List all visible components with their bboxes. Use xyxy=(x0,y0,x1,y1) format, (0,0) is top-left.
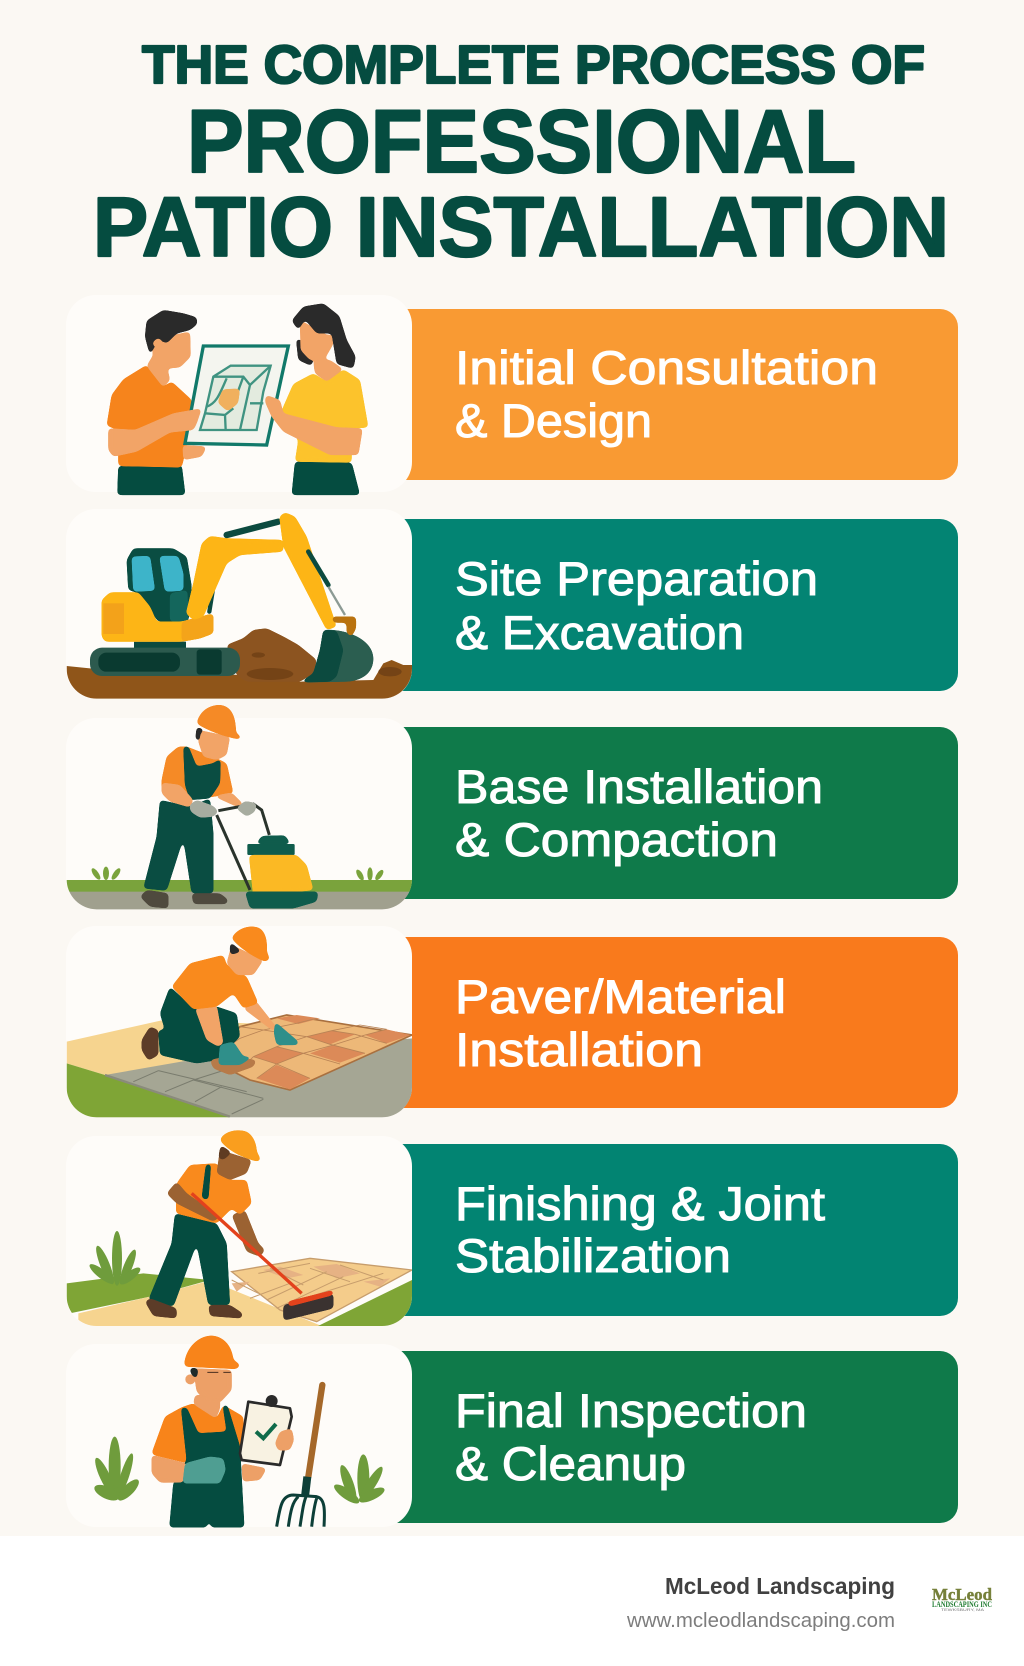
label bar: Site Preparation & Excavation xyxy=(380,519,958,691)
footer logo: LANDSCAPING INC xyxy=(932,1600,992,1609)
label bar: Paver/Material Installation xyxy=(380,937,958,1108)
title xyxy=(93,35,949,274)
title: PATIO INSTALLATION xyxy=(93,180,949,274)
footer logo: McLeod xyxy=(932,1585,993,1604)
label bar: Paver/Material Installation: Installation xyxy=(455,1023,703,1076)
label bar: Final Inspection & Cleanup xyxy=(380,1351,958,1523)
step 3: base installation xyxy=(66,705,958,910)
label bar: Final Inspection & Cleanup: & Cleanup xyxy=(455,1437,686,1490)
footer brand text: McLeod Landscaping xyxy=(665,1573,895,1599)
label bar: Final Inspection & Cleanup: Final Inspection xyxy=(455,1384,807,1437)
step 5: finishing and joint stabilization xyxy=(66,1130,958,1328)
label bar: Site Preparation & Excavation: Site Preparation xyxy=(455,552,818,605)
label bar: Finishing & Joint Stabilization: Stabilization xyxy=(455,1229,731,1282)
footer brand text xyxy=(626,1573,895,1632)
illustration panel: two people reviewing a plan xyxy=(66,295,412,495)
label bar: Base Installation & Compaction: & Compaction xyxy=(455,813,778,866)
footer logo: TEWKSBURY, MA xyxy=(941,1607,984,1612)
label bar: Base Installation & Compaction: Base Installation xyxy=(455,760,823,813)
step 2: site preparation xyxy=(66,509,958,700)
illustration panel: worker with plate compactor xyxy=(66,705,413,910)
illustration panel: inspector with clipboard and fork xyxy=(66,1336,412,1527)
label bar: Initial Consultation & Design xyxy=(380,309,958,480)
step 1: initial consultation xyxy=(66,295,958,495)
label bar: Finishing & Joint Stabilization: Finishing & Joint xyxy=(455,1177,825,1230)
label bar: Site Preparation & Excavation: & Excavation xyxy=(455,606,744,659)
footer brand text: www.mcleodlandscaping.com xyxy=(626,1610,895,1632)
label bar: Base Installation & Compaction xyxy=(380,727,958,899)
title: PROFESSIONAL xyxy=(187,91,856,191)
title: THE COMPLETE PROCESS OF xyxy=(142,35,925,95)
label bar: Paver/Material Installation: Paver/Material xyxy=(455,970,786,1023)
label bar: Initial Consultation & Design: Initial Consultation xyxy=(455,341,878,394)
step 6: final inspection xyxy=(66,1336,958,1527)
illustration panel: excavator xyxy=(66,509,412,700)
label bar: Initial Consultation & Design: & Design xyxy=(455,394,652,447)
illustration panel: worker laying pavers xyxy=(66,926,412,1117)
illustration panel: worker sweeping joints xyxy=(66,1130,412,1328)
step 4: paver installation xyxy=(66,926,958,1117)
label bar: Finishing & Joint Stabilization xyxy=(380,1144,958,1316)
